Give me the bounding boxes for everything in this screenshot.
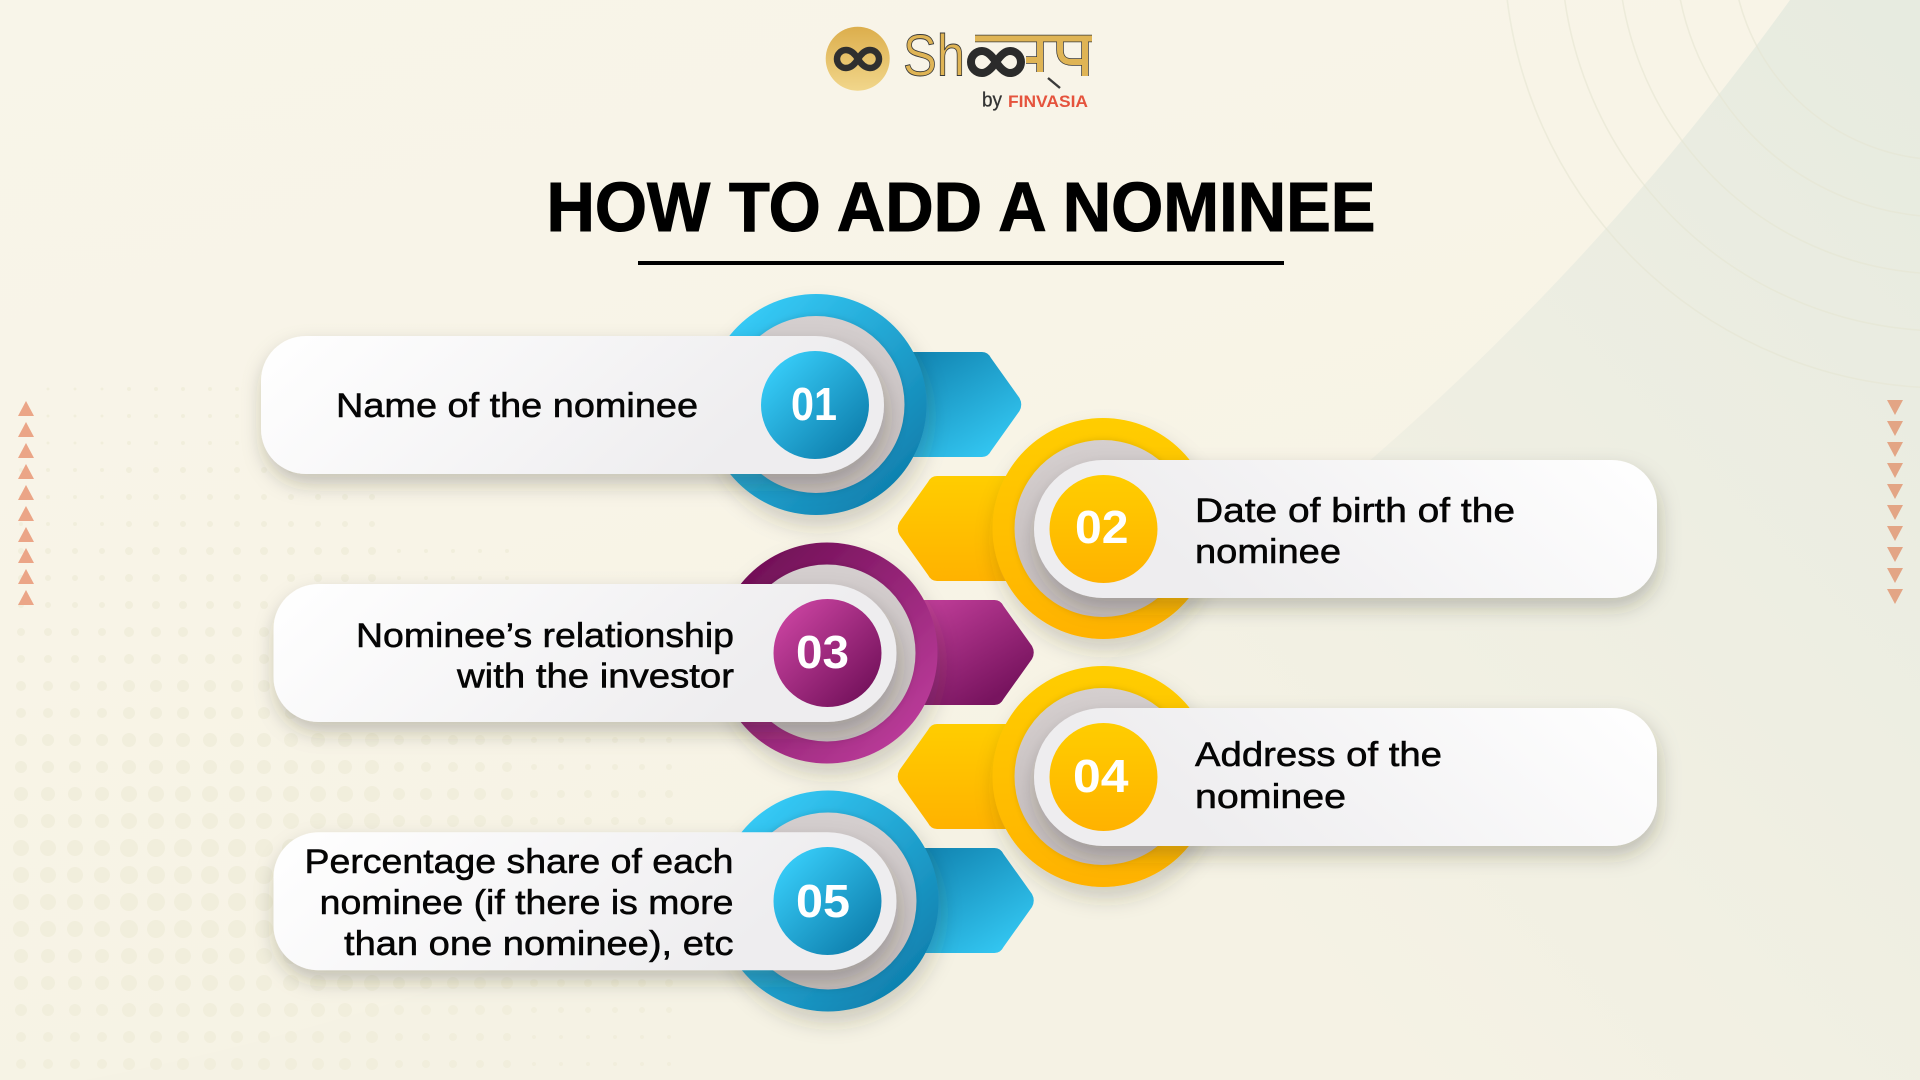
logo wordmark latin part: Sh [903,24,965,88]
grey ring 02 [1014,440,1192,617]
outer ring 04 [992,666,1214,887]
title: HOW TO ADD A NOMINEE [546,168,1376,246]
number badge 02 [1050,475,1158,583]
text 05: than one nominee), etc [344,925,734,963]
text 02 [1195,492,1515,571]
logo wordmark mark: infinity and stylised strokes [971,38,1092,88]
number badge 04 [1050,723,1158,831]
grey ring 03 [738,564,916,742]
text 05: Percentage share of each [304,843,734,881]
text 05 [304,843,734,963]
logo: Shoonya by Finvasia [826,24,1092,112]
pill 02 [1034,460,1657,598]
arrow hexagon 02 [898,476,1069,581]
step 05 [274,790,1034,1012]
grey ring 01 [728,316,904,493]
grey ring 04 [1014,688,1192,865]
pill 04 [1034,708,1657,846]
outer ring 01 [706,294,926,515]
step 04 [898,666,1657,887]
icon: gold circle with infinity [826,27,890,91]
logo byline: by [982,90,1002,112]
number badge 05 [774,847,882,955]
step 01 [261,294,1021,515]
text 04: Address of the [1195,736,1442,774]
pill 05 [274,832,896,970]
icon: right column of downward triangles [1887,400,1903,604]
number badge 01 [761,351,869,459]
icon: left column of upward triangles [18,401,34,605]
text 02: nominee [1195,533,1341,571]
number 04: 04 [1073,750,1129,802]
arrow hexagon 04 [898,724,1069,829]
number 01: 01 [791,378,837,430]
number 02: 02 [1075,501,1128,553]
text 04 [1195,736,1442,816]
number badge 03 [774,599,882,707]
number 05: 05 [796,875,850,927]
text 03 [356,617,734,696]
arrow hexagon 01 [850,352,1021,457]
text 01: Name of the nominee [336,387,698,425]
text 02: Date of birth of the [1195,492,1515,530]
outer ring 02 [992,418,1214,639]
logo Finvasia name: FINVASIA [1008,92,1088,111]
outer ring 05 [718,790,938,1012]
title underline [638,261,1284,265]
step 03 [274,542,1034,764]
arrow hexagon 05 [862,848,1034,953]
pill 03 [274,584,896,722]
text 04: nominee [1195,778,1346,816]
outer ring 03 [716,542,938,764]
step 02 [898,418,1657,639]
text 05: nominee (if there is more [320,884,734,922]
number 03: 03 [796,626,849,678]
grey ring 05 [740,812,916,990]
text 03: Nominee’s relationship [356,617,734,655]
arrow hexagon 03 [862,600,1034,705]
pill 01 [261,336,884,474]
text 03: with the investor [456,658,734,696]
